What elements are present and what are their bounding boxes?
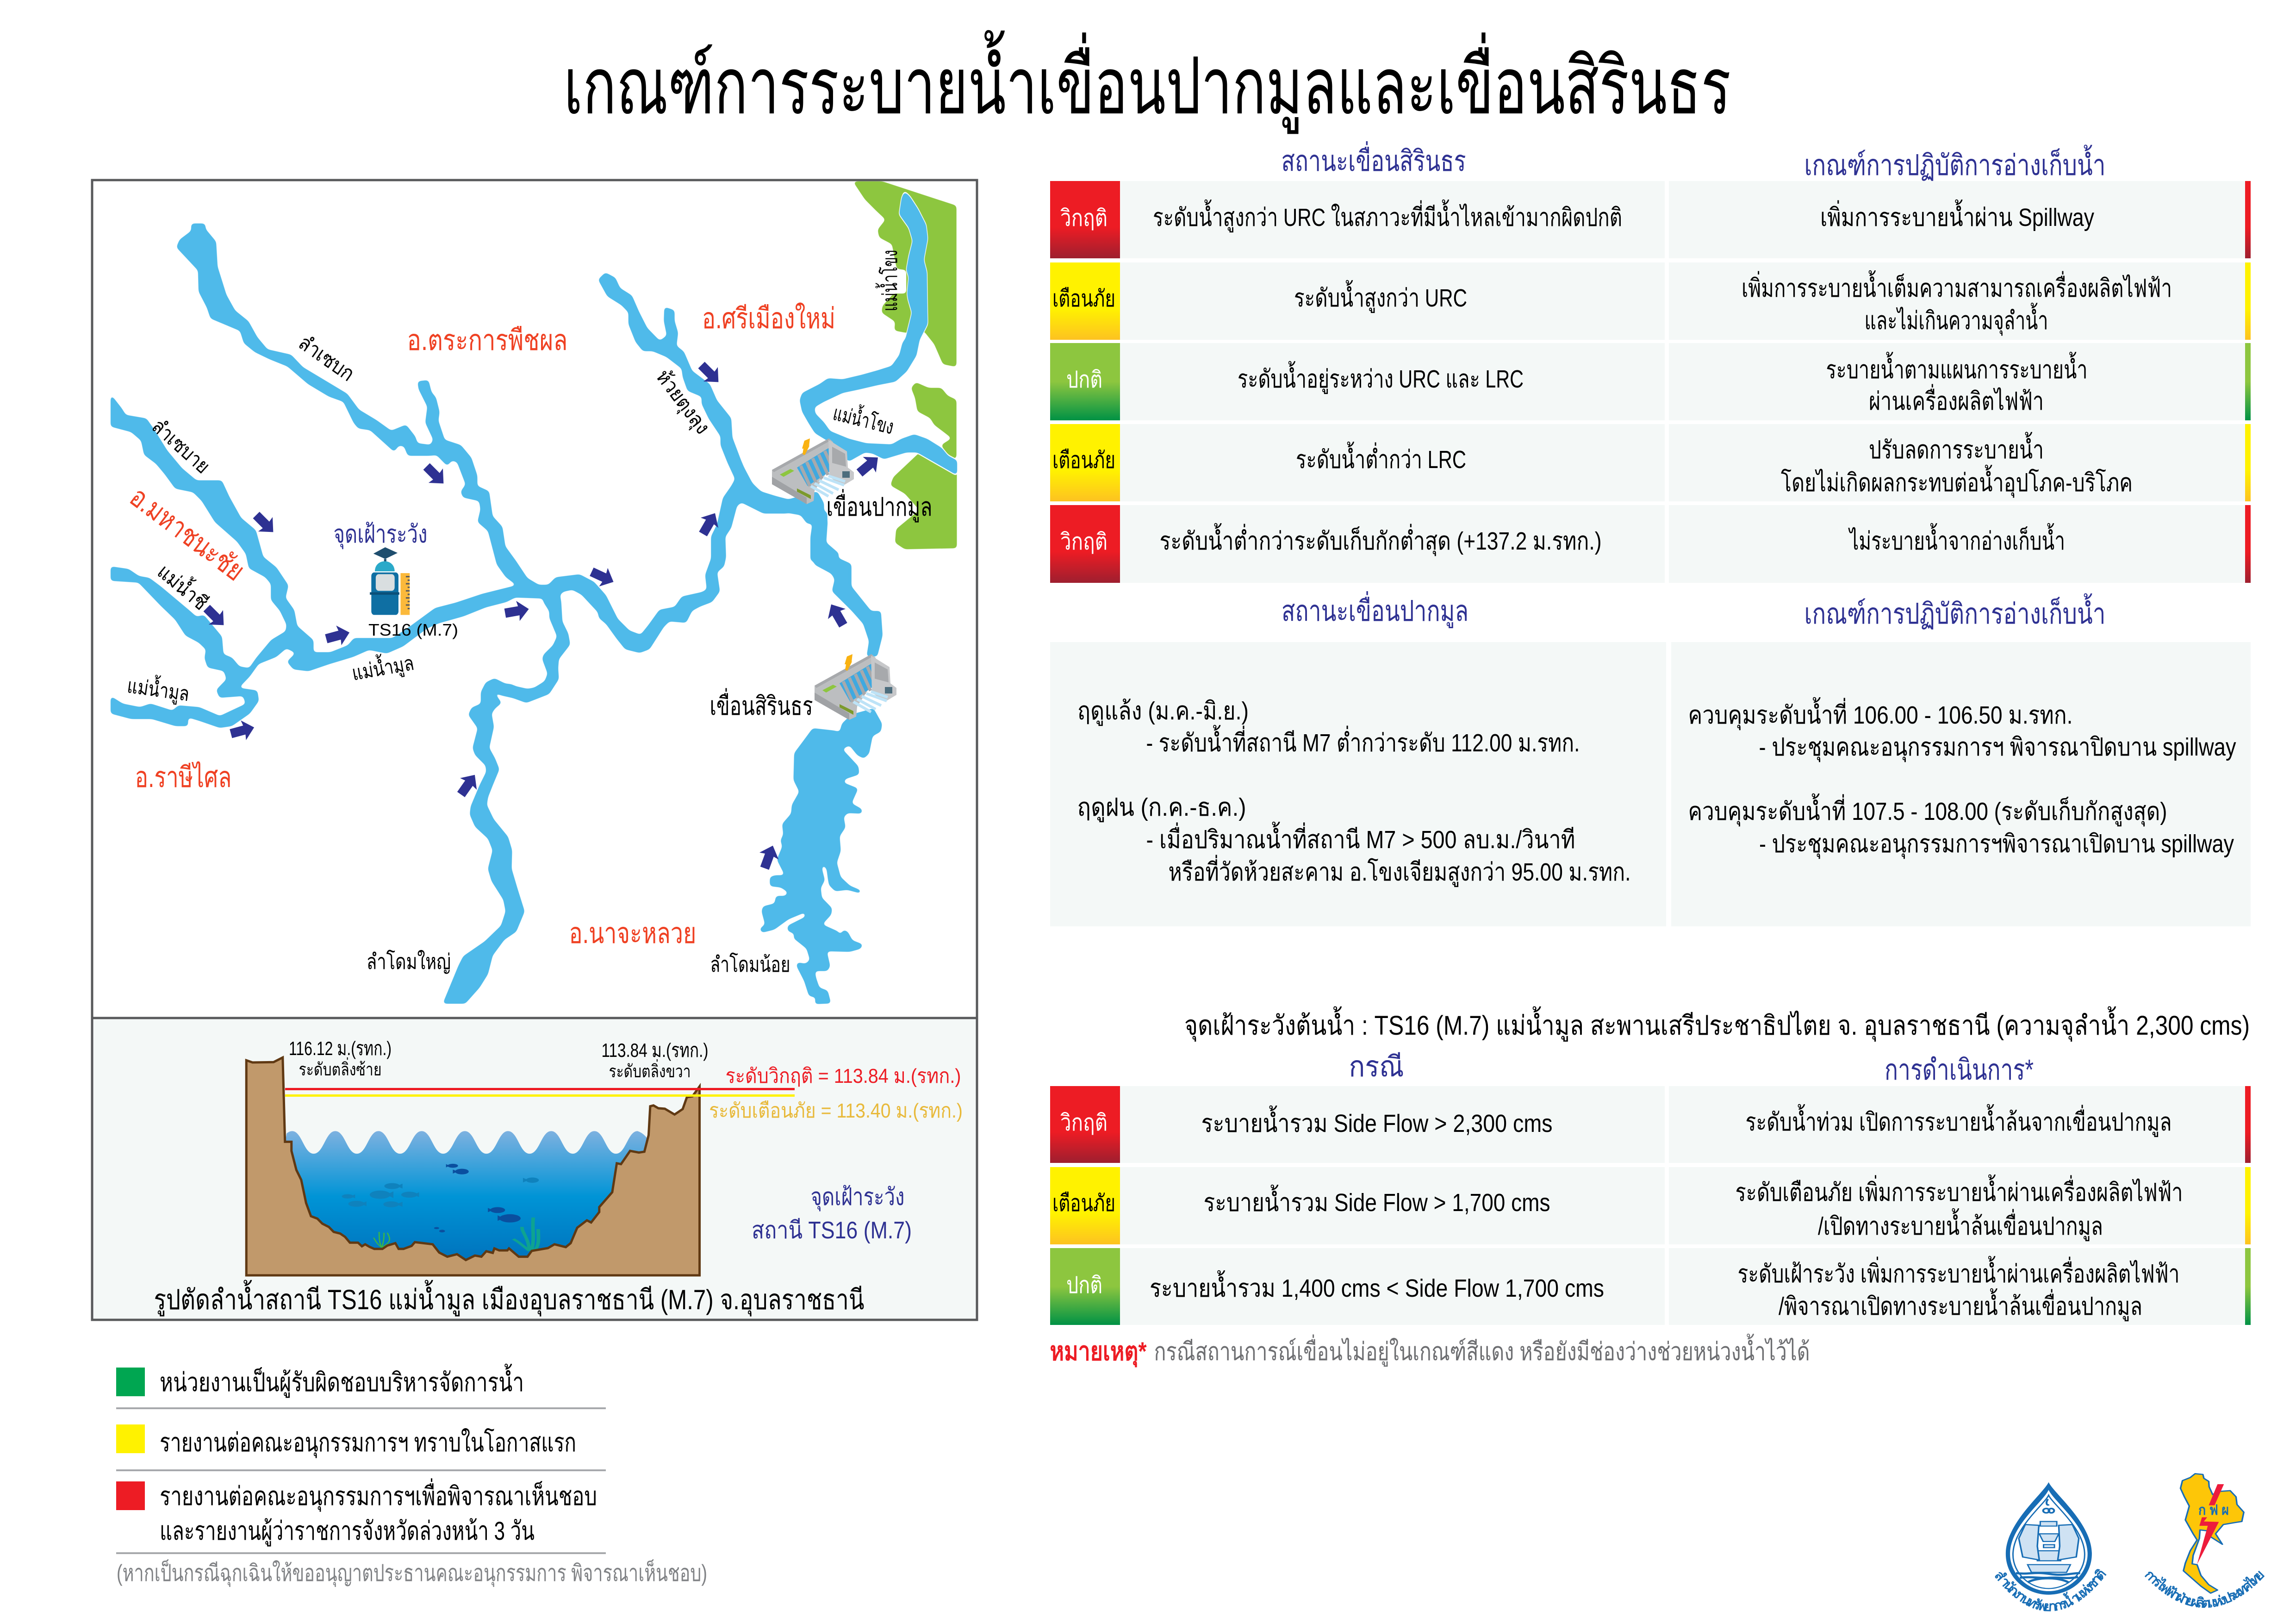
icon: Pak Mun dam: [772, 438, 854, 504]
row: warning: ระดับเตือนภัย เพิ่มการระบายน้ำผ่านเครื่องผลิตไฟฟ้า: [1736, 1174, 2183, 1206]
label: อ.มหาชนะชัย: อ.มหาชนะชัย: [124, 481, 250, 587]
row: critical: วิกฤติ: [1060, 1110, 1108, 1136]
row: warning low: เตือนภัย: [1052, 447, 1115, 473]
row: warning high: [1050, 262, 2251, 340]
row: critical high: ระดับน้ำสูงกว่า URC ในสภาวะที่มีน้ำไหลเข้ามากผิดปกติ: [1153, 200, 1622, 232]
legend: red: รายงานต่อคณะอนุกรรมการฯเพื่อพิจารณาเห็นชอบ: [160, 1478, 597, 1512]
label: แม่น้ำมูล left: แม่น้ำมูล: [125, 671, 191, 706]
label: ห้วยตุงลุง: ห้วยตุงลุง: [651, 366, 714, 439]
row: warning low: โดยไม่เกิดผลกระทบต่อน้ำอุปโภค-บริโภค: [1781, 465, 2133, 498]
heading: Sirindhorn status: สถานะเขื่อนสิรินธร: [1281, 141, 1466, 177]
panel: Sirindhorn status table: [1050, 141, 2251, 583]
row: critical high: เพิ่มการระบายน้ำผ่าน Spillway: [1820, 200, 2094, 231]
row: normal: ระบายน้ำตามแผนการระบายน้ำ: [1826, 352, 2087, 384]
cell: Pak Mun operations: ควบคุมระดับน้ำที่ 107.5 - 108.00 (ระดับเก็บกักสูงสุด): [1688, 793, 2167, 827]
heading: operating criteria: เกณฑ์การปฏิบัติการอ่างเก็บน้ำ: [1804, 593, 2106, 630]
row: normal: ผ่านเครื่องผลิตไฟฟ้า: [1869, 384, 2044, 415]
row: normal: ระบายน้ำรวม 1,400 cms < Side Flow 1,700 cms: [1150, 1270, 1604, 1302]
row: critical low: วิกฤติ: [1060, 529, 1108, 555]
row: warning: /เปิดทางระบายน้ำล้นเขื่อนปากมูล: [1818, 1208, 2103, 1241]
legend: green: [116, 1364, 524, 1398]
legend: green: หน่วยงานเป็นผู้รับผิดชอบบริหารจัดการน้ำ: [160, 1364, 524, 1398]
label: watch point: จุดเฝ้าระวัง: [811, 1184, 904, 1212]
cell: Pak Mun seasons: - ระดับน้ำที่สถานี M7 ต่ำกว่าระดับ 112.00 ม.รทก.: [1146, 725, 1580, 757]
legend: red: และรายงานผู้ว่าราชการจังหวัดล่วงหน้า 3 วัน: [160, 1516, 535, 1547]
row: normal: [1050, 1248, 2251, 1325]
curved organisation name: สำนักงานทรัพยากรน้ำแห่งชาติ: [1991, 1567, 2109, 1614]
title: เกณฑ์การระบายน้ำเขื่อนปากมูลและเขื่อนสิรินธร: [564, 30, 1731, 134]
curved organisation name: การไฟฟ้าฝ่ายผลิตแห่งประเทศไทย: [2142, 1567, 2267, 1611]
section background: [92, 1018, 977, 1320]
Thailand map with lightning: [2180, 1474, 2244, 1593]
label: เขื่อนปากมูล: เขื่อนปากมูล: [827, 489, 932, 523]
label: ลำโดมน้อย: ลำโดมน้อย: [710, 952, 790, 976]
label: critical level: ระดับวิกฤติ = 113.84 ม.(รทก.): [726, 1065, 961, 1087]
label: แม่น้ำมูล centre: แม่น้ำมูล: [349, 648, 416, 686]
row: critical low: ระดับน้ำต่ำกว่าระดับเก็บกักต่ำสุด (+137.2 ม.รทก.): [1160, 523, 1601, 556]
panel frame: [92, 180, 977, 1018]
caption: cross-section: รูปตัดลำน้ำสถานี TS16 แม่น้ำมูล เมืองอุบลราชธานี (M.7) จ.อุบลราชธานี: [154, 1280, 865, 1317]
logo: EGAT: [2142, 1474, 2267, 1611]
label: ลำโดมใหญ่: ลำโดมใหญ่: [367, 949, 451, 974]
row: warning high: และไม่เกินความจุลำน้ำ: [1864, 303, 2048, 336]
row: warning low: ปรับลดการระบายน้ำ: [1869, 432, 2044, 464]
label: station: สถานี TS16 (M.7): [752, 1217, 912, 1244]
label: แม่น้ำชี: แม่น้ำชี: [153, 557, 214, 615]
water body with waves and fish: [285, 1131, 650, 1262]
cell: Pak Mun seasons: [1050, 642, 1666, 926]
Mekong white outline: [800, 193, 957, 474]
note: [1050, 1334, 1810, 1368]
row: critical low: [1050, 505, 2251, 583]
row: critical high: วิกฤติ: [1060, 205, 1108, 231]
row: normal: ระดับเฝ้าระวัง เพิ่มการระบายน้ำผ่านเครื่องผลิตไฟฟ้า: [1737, 1256, 2180, 1288]
panel: river map: [92, 180, 977, 1018]
row: warning low: [1050, 424, 2251, 501]
row: warning high: เตือนภัย: [1052, 286, 1115, 312]
riverbank ground: [246, 1057, 700, 1275]
row: critical: [1050, 1086, 2251, 1163]
heading: operating criteria: เกณฑ์การปฏิบัติการอ่างเก็บน้ำ: [1804, 144, 2106, 181]
label: อ.ราษีไศล: อ.ราษีไศล: [135, 761, 231, 793]
heading: case: กรณี: [1349, 1051, 1404, 1083]
cell: Pak Mun seasons: ฤดูแล้ง (ม.ค.-มิ.ย.): [1077, 697, 1249, 726]
icon: water gauge station: [370, 547, 410, 615]
legend: yellow: รายงานต่อคณะอนุกรรมการฯ ทราบในโอกาสแรก: [160, 1428, 576, 1458]
label: ลำเซบาย: ลำเซบาย: [148, 415, 214, 478]
legend: footnote: (หากเป็นกรณีฉุกเฉินให้ขออนุญาตประธานคณะอนุกรรมการ พิจารณาเห็นชอบ): [117, 1559, 707, 1587]
label: จุดเฝ้าระวัง: จุดเฝ้าระวัง: [333, 520, 428, 550]
row: normal: /พิจารณาเปิดทางระบายน้ำล้นเขื่อนปากมูล: [1779, 1288, 2142, 1321]
label: TS16 (M.7): TS16 (M.7): [368, 620, 458, 639]
row: warning low: ระดับน้ำต่ำกว่า LRC: [1296, 442, 1466, 474]
label: แม่น้ำโขง: แม่น้ำโขง: [831, 398, 897, 439]
map labels: [124, 250, 932, 976]
note: กรณีสถานการณ์เขื่อนไม่อยู่ในเกณฑ์สีแดง หรือยังมีช่องว่างช่วยหน่วงน้ำไว้ได้: [1154, 1334, 1810, 1367]
row: critical high: [1050, 181, 2251, 258]
row: warning: เตือนภัย: [1052, 1190, 1115, 1216]
row: normal: ปกติ: [1066, 367, 1102, 393]
flow arrows: [199, 358, 884, 872]
logo: Office of National Water Resources: [1991, 1482, 2109, 1614]
cell: Pak Mun operations: ควบคุมระดับน้ำที่ 106.00 - 106.50 ม.รทก.: [1688, 697, 2072, 731]
label: ลำเซบก: ลำเซบก: [294, 331, 359, 386]
note: หมายเหตุ*: [1050, 1337, 1147, 1368]
row: normal: ระดับน้ำอยู่ระหว่าง URC และ LRC: [1238, 361, 1524, 394]
label: แม่น้ำโขง vertical: แม่น้ำโขง: [875, 250, 902, 311]
label: right bank: ระดับตลิ่งขวา: [609, 1059, 691, 1081]
label: left bank height: 116.12 ม.(รทก.): [289, 1037, 392, 1059]
row: warning: ระบายน้ำรวม Side Flow > 1,700 cms: [1203, 1185, 1550, 1217]
label: left bank: ระดับตลิ่งซ้าย: [299, 1057, 381, 1080]
row: warning: [1050, 1167, 2251, 1244]
row: normal: ปกติ: [1066, 1272, 1102, 1298]
rivers: [111, 193, 957, 1004]
panel: river cross-section: [92, 1018, 977, 1320]
legend: red: [116, 1478, 597, 1547]
cell: Pak Mun seasons: - เมื่อปริมาณน้ำที่สถานี M7 > 500 ลบ.ม./วินาที: [1146, 822, 1575, 854]
cell: Pak Mun seasons: หรือที่วัดห้วยสะคาม อ.โขงเจียมสูงกว่า 95.00 ม.รทก.: [1168, 855, 1631, 887]
row: critical: ระบายน้ำรวม Side Flow > 2,300 cms: [1201, 1106, 1552, 1137]
row: critical low: ไม่ระบายน้ำจากอ่างเก็บน้ำ: [1848, 523, 2065, 555]
critical level line: [285, 1088, 795, 1090]
label: อ.ศรีเมืองใหม่: อ.ศรีเมืองใหม่: [702, 302, 835, 335]
row: warning high: เพิ่มการระบายน้ำเต็มความสามารถเครื่องผลิตไฟฟ้า: [1742, 270, 2172, 302]
water drop emblem: [2006, 1482, 2092, 1595]
panel: upstream watch point table: [1050, 1006, 2251, 1368]
EGAT initials: ก ฟ ผ: [2198, 1503, 2229, 1518]
row: normal: [1050, 343, 2251, 420]
panel: Pak Mun status table: [1050, 591, 2251, 926]
label: warning level: ระดับเตือนภัย = 113.40 ม.(รทก.): [709, 1099, 963, 1122]
label: อ.ตระการพืชผล: อ.ตระการพืชผล: [407, 325, 567, 356]
legend: yellow: [116, 1424, 576, 1458]
row: warning high: ระดับน้ำสูงกว่า URC: [1294, 280, 1467, 313]
label: เขื่อนสิรินธร: เขื่อนสิรินธร: [710, 688, 813, 720]
cell: Pak Mun seasons: ฤดูฝน (ก.ค.-ธ.ค.): [1077, 793, 1246, 822]
icon: Sirindhorn dam: [815, 654, 896, 720]
label: right bank height: 113.84 ม.(รทก.): [602, 1039, 708, 1061]
row: critical: ระดับน้ำท่วม เปิดการระบายน้ำล้นจากเขื่อนปากมูล: [1746, 1104, 2172, 1137]
land: green Laos side: [853, 181, 957, 550]
heading: action: การดำเนินการ*: [1885, 1054, 2034, 1086]
panel: responsibility legend: [116, 1364, 707, 1587]
heading: Pak Mun status: สถานะเขื่อนปากมูล: [1282, 591, 1468, 628]
cell: Pak Mun operations: [1671, 642, 2251, 926]
label: อ.นาจะหลวย: อ.นาจะหลวย: [569, 918, 696, 949]
warning level line: [285, 1094, 795, 1097]
